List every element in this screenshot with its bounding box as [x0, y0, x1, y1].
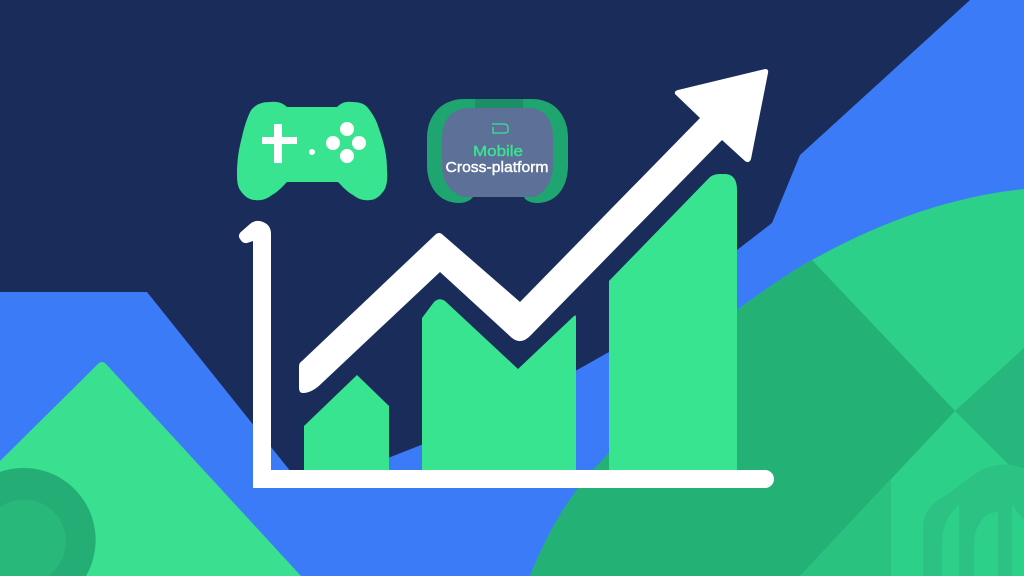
growth arrow [299, 69, 768, 393]
icon: mobile cross-platform badge [427, 99, 568, 203]
label: Cross-platform: Cross-platform [446, 159, 548, 176]
buttons [326, 122, 366, 163]
chart axes [239, 221, 774, 488]
icon: game controller [237, 102, 387, 200]
bar 1 [304, 375, 389, 470]
d-pad [262, 124, 297, 163]
label: Mobile: Mobile [473, 143, 523, 160]
center dot [309, 149, 315, 155]
bar chart [304, 174, 737, 470]
background: circle ring [0, 468, 96, 576]
background: left green triangle [0, 362, 301, 576]
background: large green hill [530, 189, 1024, 576]
bar 3 [609, 174, 737, 470]
small battery icon [492, 124, 508, 133]
background: arches pattern [923, 465, 1024, 576]
bar 2 [422, 299, 576, 470]
